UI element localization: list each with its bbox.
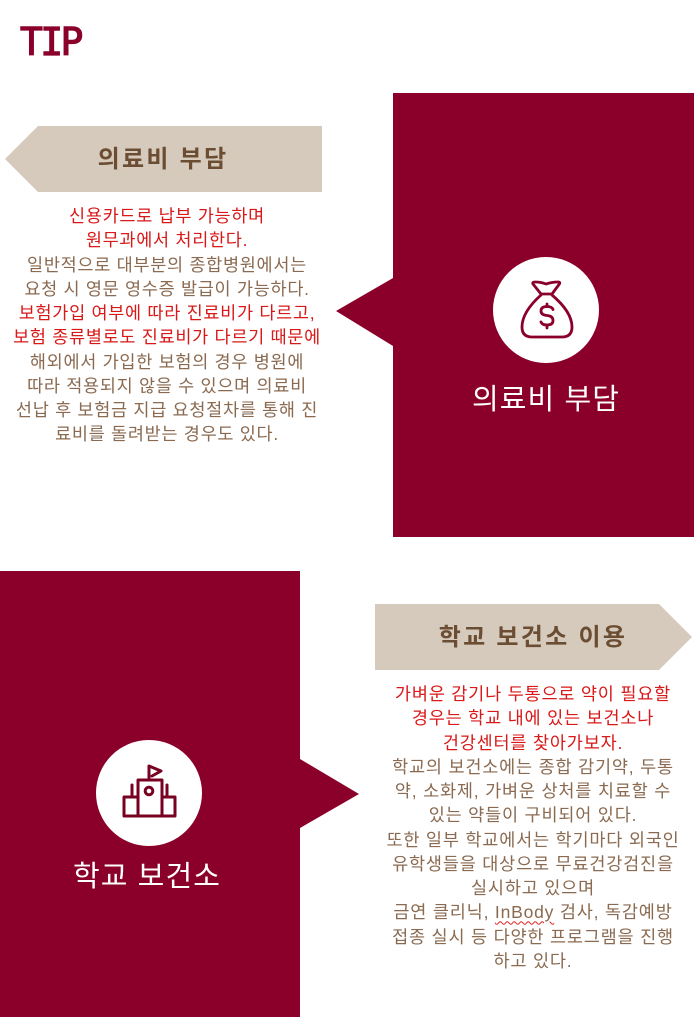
icon: money bag <box>493 257 599 363</box>
banner: medical cost <box>5 126 322 192</box>
panel label: 학교 보건소 <box>73 861 221 893</box>
text block: school health center <box>386 684 680 971</box>
text block: school health center: 있는 약들이 구비되어 있다. <box>429 805 637 825</box>
banner heading: 학교 보건소 이용 <box>439 624 627 651</box>
text block: school health center: 약, 소화제, 가벼운 상처를 치료할 수 <box>395 781 671 801</box>
text block: medical cost: 선납 후 보험금 지급 요청절차를 통해 진 <box>16 400 318 420</box>
text block: school health center: 하고 있다. <box>494 951 572 971</box>
banner: school health center use <box>375 604 692 670</box>
text block: school health center: 접종 실시 등 다양한 프로그램을 진행 <box>392 926 674 946</box>
title: TIP <box>20 20 81 64</box>
text block: medical cost: 료비를 돌려받는 경우도 있다. <box>55 424 279 444</box>
text block: medical cost: 따라 적용되지 않을 수 있으며 의료비 <box>27 376 307 396</box>
text block: medical cost <box>13 206 321 444</box>
text block: medical cost: 보험가입 여부에 따라 진료비가 다르고, <box>19 303 315 323</box>
text block: school health center: 경우는 학교 내에 있는 보건소나 <box>412 708 654 728</box>
banner heading: 의료비 부담 <box>98 146 228 173</box>
text block: school health center: 또한 일부 학교에서는 학기마다 외국인 <box>386 830 680 850</box>
panel background with arrow <box>0 571 359 1017</box>
icon: school building <box>96 740 202 846</box>
panel label: 의료비 부담 <box>472 384 620 416</box>
text block: school health center: 유학생들을 대상으로 무료건강검진을 <box>392 854 674 874</box>
text block: school health center: 금연 클리닉, InBody 검사, 독감예방 <box>393 902 673 922</box>
panel background with arrow <box>336 93 694 537</box>
text block: school health center: 학교의 보건소에는 종합 감기약, 두통 <box>392 757 674 777</box>
text block: medical cost: 보험 종류별로도 진료비가 다르기 때문에 <box>13 327 321 347</box>
banner shape <box>5 126 322 192</box>
panel: school health center <box>0 571 359 1017</box>
text block: medical cost: 해외에서 가입한 보험의 경우 병원에 <box>30 352 304 372</box>
text block: school health center: 건강센터를 찾아가보자. <box>443 732 623 752</box>
text block: school health center: 실시하고 있으며 <box>471 878 595 898</box>
banner shape <box>375 604 692 670</box>
text block: medical cost: 원무과에서 처리한다. <box>86 230 248 250</box>
panel: medical cost <box>336 93 694 537</box>
text block: medical cost: 일반적으로 대부분의 종합병원에서는 <box>27 254 307 274</box>
text block: medical cost: 신용카드로 납부 가능하며 <box>69 206 265 226</box>
text block: medical cost: 요청 시 영문 영수증 발급이 가능하다. <box>24 279 310 299</box>
text block: school health center: 가벼운 감기나 두통으로 약이 필요할 <box>395 684 671 704</box>
